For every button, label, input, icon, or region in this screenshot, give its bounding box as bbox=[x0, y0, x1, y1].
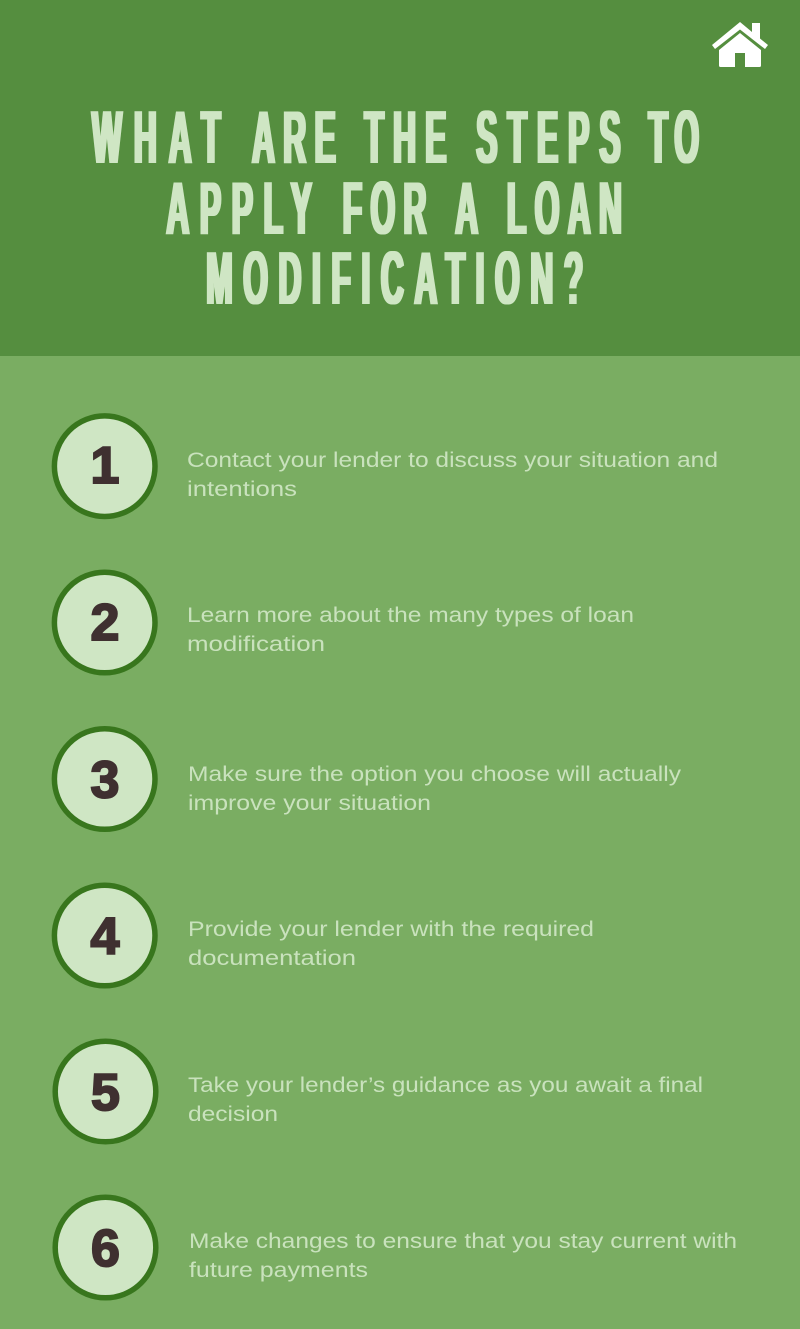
step 4 text: documentation bbox=[188, 946, 356, 970]
step 1 text bbox=[187, 448, 718, 501]
step 6 text bbox=[189, 1229, 737, 1282]
step 5 text: Take your lender’s guidance as you await a final bbox=[188, 1073, 703, 1097]
badge: number 1: 1 bbox=[91, 437, 119, 495]
step 2 text: modification bbox=[187, 632, 325, 656]
step 5 bbox=[55, 1041, 703, 1142]
icon: house bbox=[712, 22, 768, 67]
badge: number 1 bbox=[54, 416, 155, 516]
title: ARE bbox=[252, 97, 361, 180]
header band bbox=[0, 0, 800, 356]
title: THE bbox=[365, 97, 474, 180]
title: WHAT bbox=[92, 97, 253, 180]
step 6 text: Make changes to ensure that you stay current with bbox=[189, 1229, 737, 1253]
title bbox=[92, 97, 706, 321]
step 2 bbox=[54, 572, 634, 673]
title: STEPS bbox=[476, 97, 650, 180]
title: APPLY bbox=[166, 168, 342, 251]
step 2 text bbox=[187, 603, 634, 656]
title: TO bbox=[648, 97, 706, 180]
badge: number 3: 3 bbox=[91, 752, 119, 810]
badge: number 5 bbox=[55, 1041, 156, 1142]
title: MODIFICATION? bbox=[206, 238, 594, 321]
badge: number 2: 2 bbox=[91, 594, 119, 652]
step 2 text: Learn more about the many types of loan bbox=[187, 603, 634, 627]
step 4 text: Provide your lender with the required bbox=[188, 917, 594, 941]
badge: number 2 bbox=[54, 572, 155, 673]
badge: number 4: 4 bbox=[91, 908, 120, 966]
title: A bbox=[455, 168, 486, 251]
step 4 text bbox=[188, 917, 594, 970]
step 1 text: Contact your lender to discuss your situation and bbox=[187, 448, 718, 472]
step 6 text: future payments bbox=[189, 1258, 368, 1282]
badge: number 4 bbox=[54, 885, 155, 986]
step 4 bbox=[54, 885, 594, 986]
step 3 bbox=[54, 729, 681, 829]
step 1 text: intentions bbox=[187, 477, 297, 501]
title: LOAN bbox=[507, 168, 630, 251]
badge: number 6: 6 bbox=[91, 1220, 120, 1278]
step 3 text: Make sure the option you choose will actually bbox=[188, 762, 681, 786]
step 1 bbox=[54, 416, 718, 516]
badge: number 3 bbox=[54, 729, 155, 829]
badge: number 6 bbox=[55, 1197, 156, 1298]
step 3 text: improve your situation bbox=[188, 791, 431, 815]
step 3 text bbox=[188, 762, 681, 815]
step 5 text: decision bbox=[188, 1102, 278, 1126]
badge: number 5: 5 bbox=[91, 1064, 120, 1122]
step 6 bbox=[55, 1197, 737, 1298]
title: FOR bbox=[343, 168, 452, 251]
step 5 text bbox=[188, 1073, 703, 1126]
